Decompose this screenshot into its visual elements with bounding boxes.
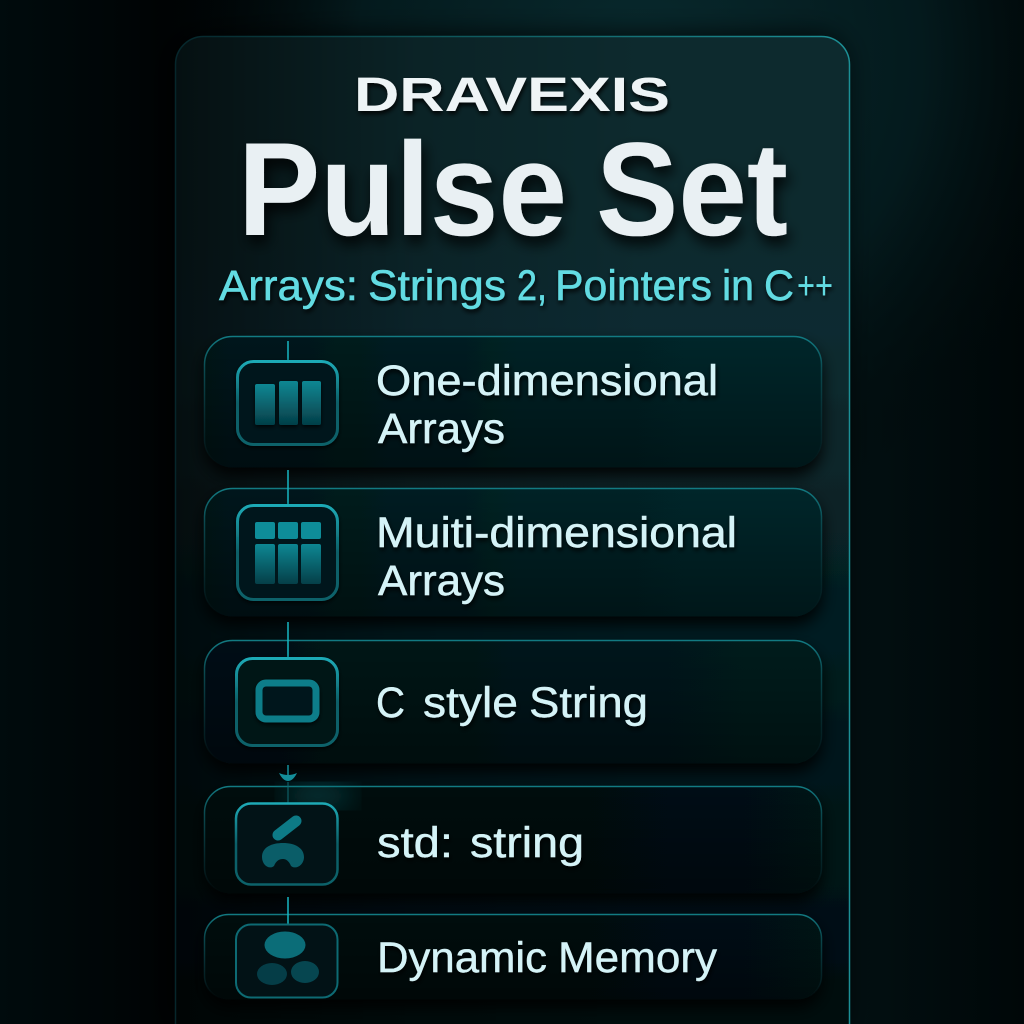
icon: grid	[238, 506, 338, 600]
icon: one-dimensional array	[238, 362, 338, 444]
label: C	[376, 679, 405, 727]
label: One-dimensional	[376, 357, 718, 405]
label: Memory	[558, 934, 718, 982]
label: Muiti-dimensional	[376, 509, 737, 557]
arrow	[279, 765, 297, 781]
icon: std string	[236, 804, 338, 884]
subtitle: 2,	[517, 262, 547, 310]
connector	[287, 622, 289, 658]
connector	[287, 341, 289, 361]
card: Dynamic Memory	[204, 897, 822, 1000]
label: Arrays	[378, 557, 505, 605]
label: Arrays	[378, 405, 505, 453]
connector	[287, 897, 289, 930]
title	[238, 116, 788, 264]
label	[376, 357, 718, 453]
connector	[287, 782, 289, 803]
label	[377, 934, 718, 982]
panel: main container	[176, 36, 850, 1024]
glow behind icon	[282, 784, 354, 808]
subtitle: Arrays:	[219, 262, 358, 310]
icon: string box	[236, 658, 338, 746]
label	[376, 509, 737, 605]
subtitle	[219, 262, 833, 310]
card: Multi-dimensional Arrays	[204, 470, 822, 616]
card: C style String	[204, 622, 822, 764]
title: Pulse	[238, 116, 567, 264]
card: std string	[204, 782, 822, 894]
label: Dynamic	[377, 934, 547, 982]
connector	[287, 470, 289, 505]
card: One-dimensional Arrays	[204, 336, 822, 468]
subtitle: Strings	[368, 262, 506, 310]
label: style	[423, 679, 518, 727]
brand name: DRAVEXIS	[354, 69, 670, 122]
subtitle: in	[722, 262, 754, 310]
subtitle: C	[764, 262, 794, 310]
subtitle: ++	[797, 264, 833, 308]
label: string	[470, 819, 584, 867]
title: Set	[596, 116, 788, 264]
label	[377, 819, 584, 867]
label: std:	[377, 819, 453, 867]
label: String	[529, 679, 648, 727]
subtitle: Pointers	[555, 262, 712, 310]
icon: memory blobs	[236, 924, 338, 998]
label	[376, 679, 648, 727]
